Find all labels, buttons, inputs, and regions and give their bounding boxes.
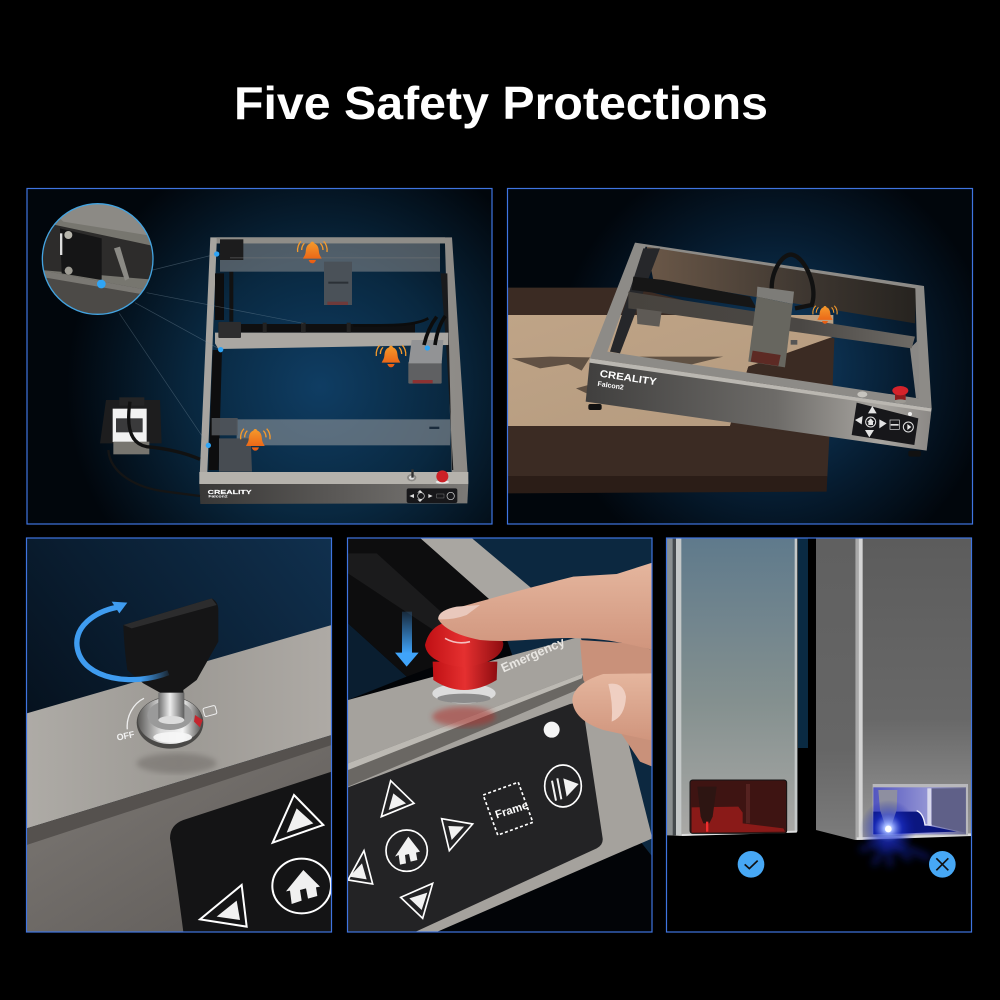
machine front bar — [27, 625, 332, 932]
laser glow — [860, 800, 930, 867]
machine branding — [208, 490, 252, 499]
key — [123, 598, 218, 693]
leader lines — [119, 254, 303, 445]
laser head: middle — [384, 315, 446, 384]
emergency stop button — [425, 621, 503, 727]
machine branding: CREALITY — [208, 490, 252, 496]
ghost gantry: bottom position — [212, 418, 450, 445]
sensor markers — [206, 251, 430, 448]
red acrylic window — [690, 780, 787, 833]
ghost laser head: bottom — [219, 438, 252, 472]
machine interior back wall — [647, 247, 917, 323]
machine branding — [598, 370, 657, 390]
panel: machine on table — [507, 189, 973, 524]
title: Five Safety Protections — [234, 77, 768, 129]
hand pressing button — [438, 563, 652, 767]
key switch labels: OFF — [116, 729, 136, 743]
laser head with shield — [667, 538, 797, 836]
icon: check badge — [738, 851, 764, 878]
control panel — [170, 772, 332, 932]
machine branding: CREALITY — [599, 369, 658, 388]
icon: alarm bell middle — [376, 345, 406, 367]
key lock cylinder — [137, 693, 203, 749]
panel: key switch — [27, 538, 332, 932]
emergency label: Emergency — [499, 635, 567, 675]
icon: alarm bell top — [298, 241, 327, 263]
control panel — [348, 703, 603, 932]
icon: alarm bell bottom — [241, 429, 270, 451]
rotation arrow — [77, 602, 168, 680]
control panel — [852, 403, 918, 445]
machine branding: Falcon2 — [208, 494, 229, 499]
feet — [588, 404, 921, 457]
open window with blue glow — [873, 784, 968, 835]
frame rail — [348, 538, 532, 677]
ghost laser head: top — [324, 262, 352, 305]
gantry — [628, 277, 915, 348]
panel: emergency stop — [348, 538, 652, 932]
key switch labels — [116, 698, 217, 743]
panel: limit switch overview — [27, 189, 493, 524]
icon: alarm bell — [813, 306, 837, 324]
machine frame — [586, 243, 932, 451]
limit switch module — [100, 397, 200, 496]
gantry: middle — [215, 322, 448, 349]
icon: cross badge — [929, 851, 956, 878]
ghost gantry: top position — [220, 239, 440, 272]
wood workpiece with engraving — [507, 315, 834, 437]
laser head without shield — [816, 538, 972, 867]
panel: laser shield comparison — [667, 538, 972, 932]
machine branding: Falcon2 — [597, 381, 624, 392]
panel borders — [26, 188, 972, 932]
control panel: Frame — [494, 800, 530, 822]
emergency stop button — [892, 386, 908, 403]
control panel and emergency stop — [407, 469, 457, 503]
table — [507, 288, 834, 493]
machine frame top view — [199, 237, 468, 504]
inset: limit switch close-up — [40, 200, 157, 320]
machine front bar — [348, 637, 652, 932]
laser head — [748, 255, 813, 367]
arrow: press down — [395, 612, 419, 667]
key switch — [857, 391, 867, 397]
